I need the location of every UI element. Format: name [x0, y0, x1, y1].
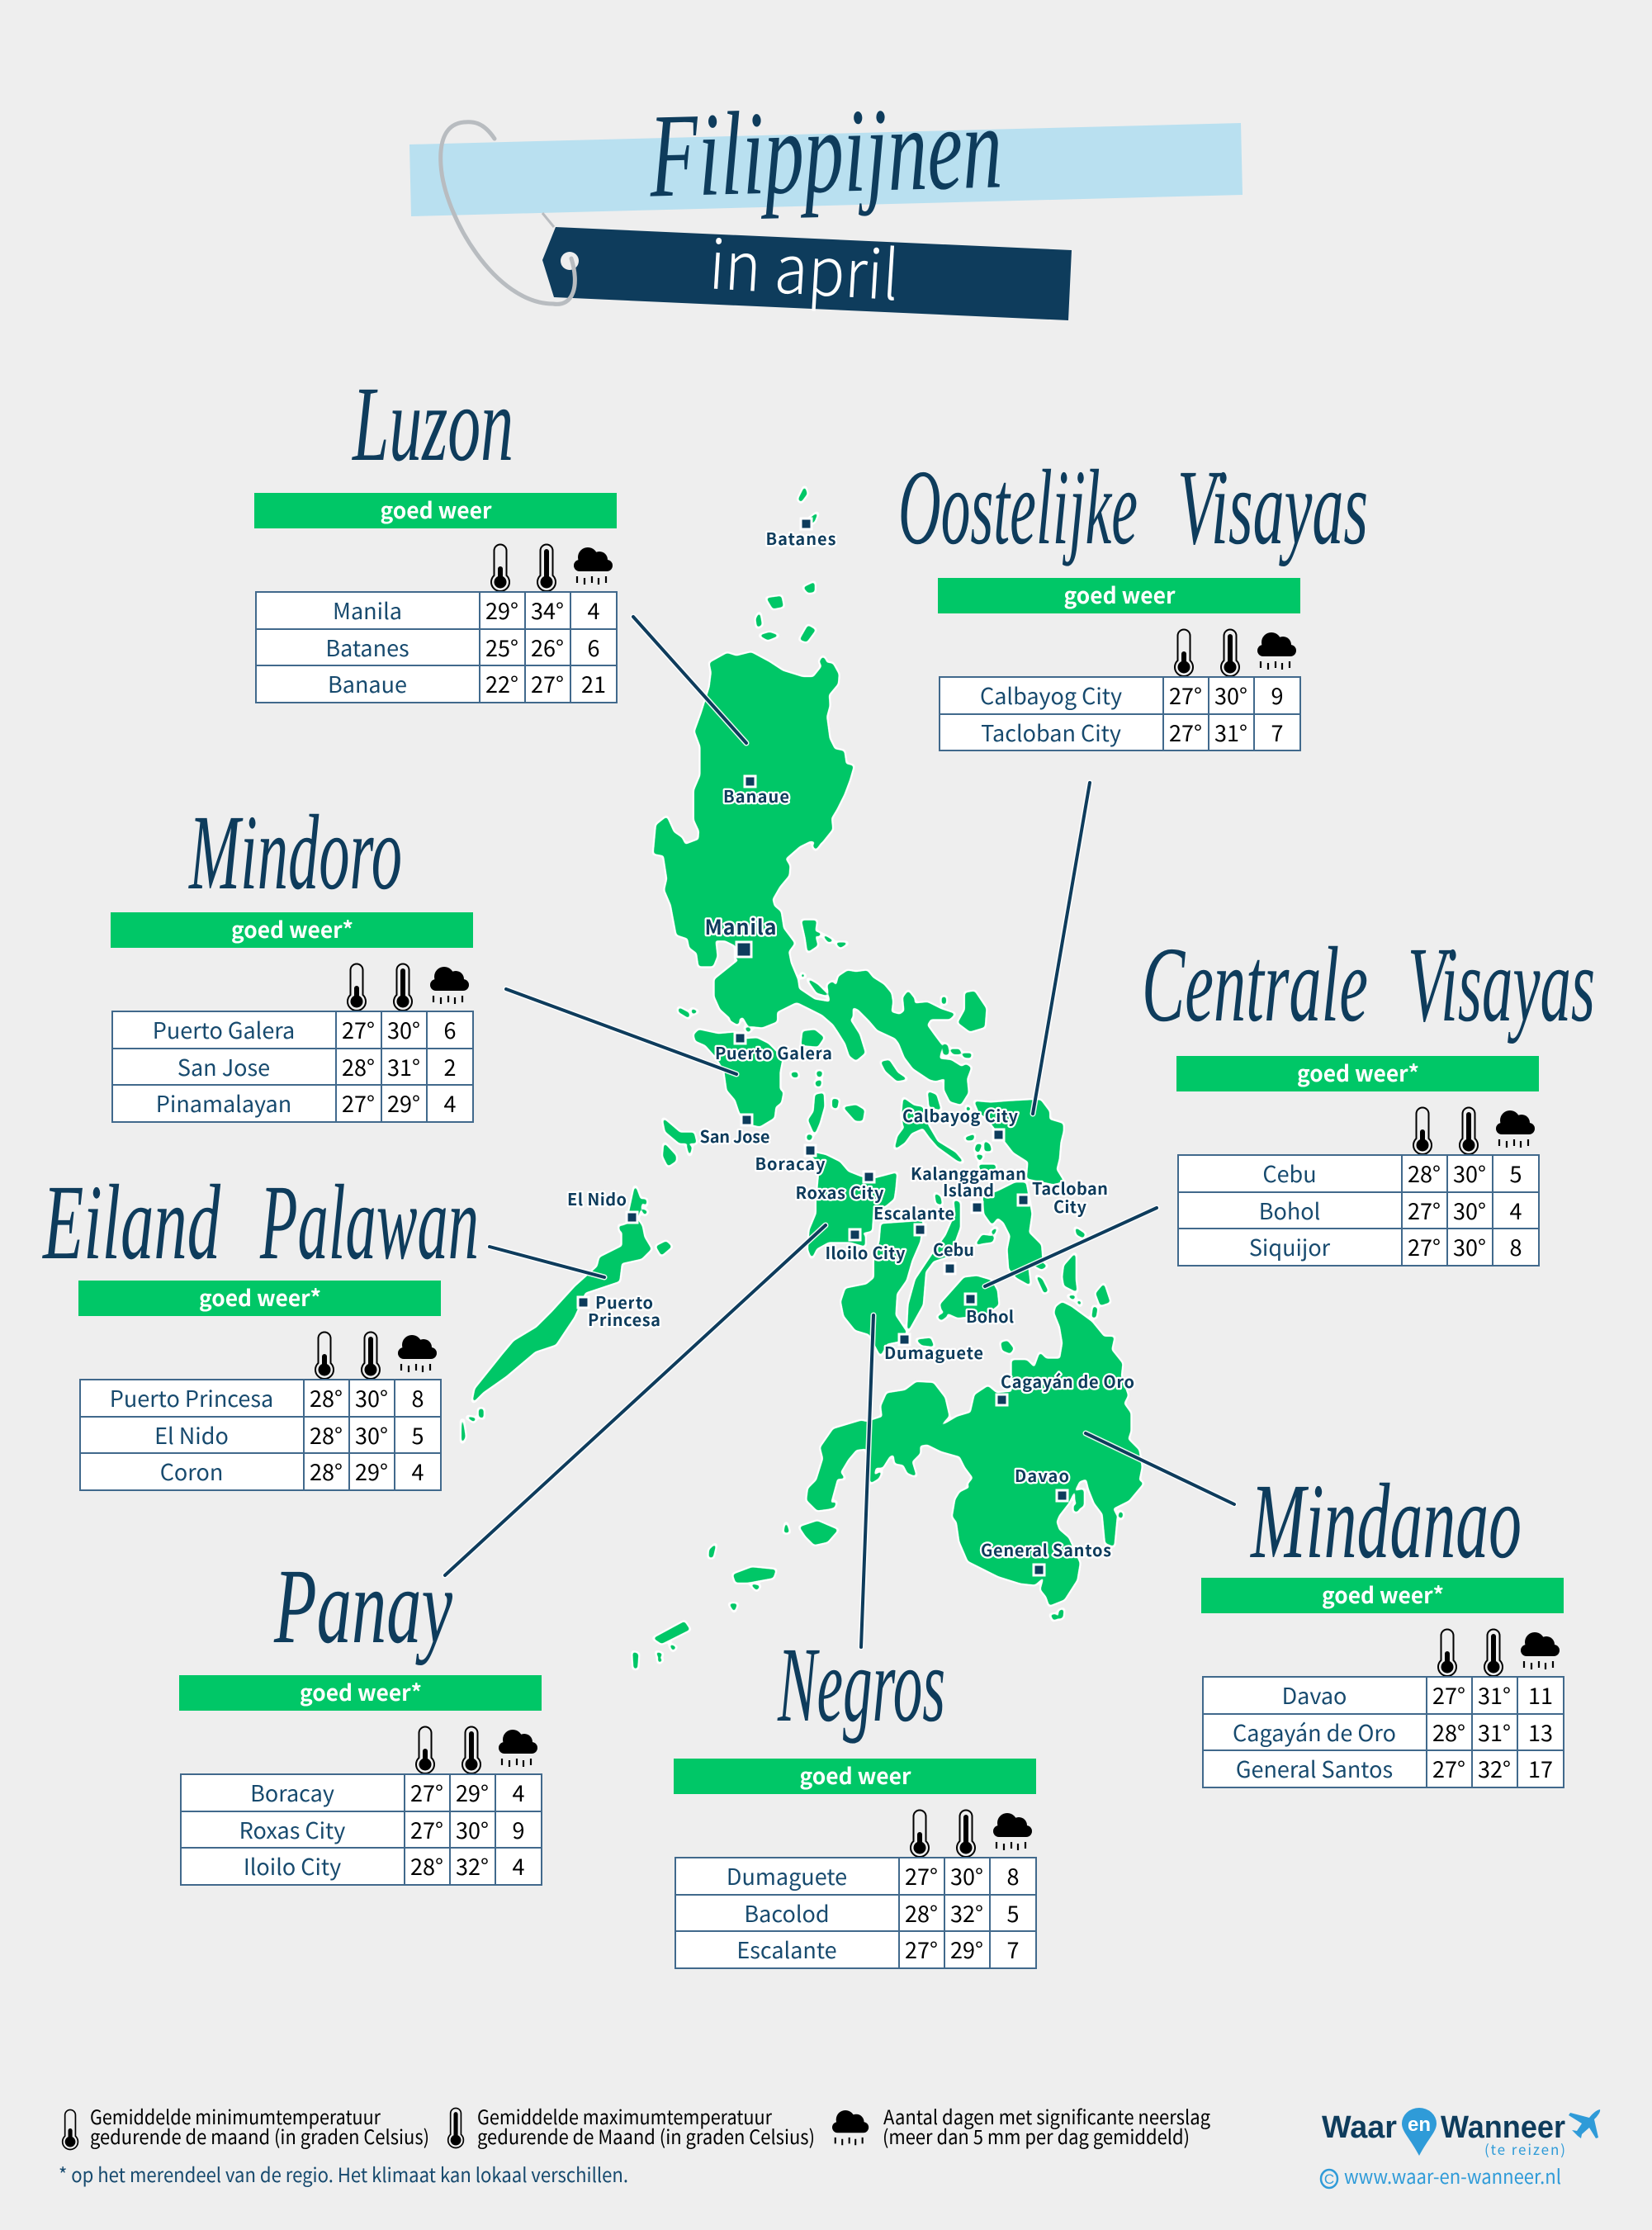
- table: Negros: 7: [1007, 1933, 1019, 1965]
- legend: [59, 2101, 1210, 2188]
- heading: Eiland Palawan: [42, 1163, 479, 1282]
- icon: map pin: [1402, 2108, 1437, 2156]
- legend: precipitation: Aantal dagen met significante neerslag: [883, 2101, 1210, 2130]
- logo: Wanneer: Wanneer: [1441, 2110, 1565, 2145]
- table: Mindoro: 31°: [387, 1050, 420, 1082]
- table: Luzon: 6: [588, 631, 599, 663]
- table: Mindoro: Pinamalayan: [156, 1087, 291, 1119]
- table: Luzon: Batanes: [325, 631, 409, 663]
- table: Mindoro: 27°: [342, 1013, 375, 1045]
- legend: maximum temperature: [448, 2101, 815, 2150]
- legend: precipitation: (meer dan 5 mm per dag gemiddeld): [883, 2121, 1190, 2150]
- map labels: General Santos: [981, 1537, 1111, 1561]
- table: Eiland Palawan: 30°: [355, 1381, 388, 1413]
- map labels: Kalanggaman: [911, 1161, 1026, 1185]
- table: Mindoro: 6: [444, 1013, 456, 1045]
- map labels: Davao: [1015, 1463, 1069, 1487]
- map markers: [578, 518, 1067, 1575]
- table: Panay: 4: [512, 1776, 525, 1808]
- table: Mindanao: 13: [1528, 1716, 1553, 1748]
- table: Luzon: 29°: [485, 594, 518, 626]
- table: Panay: 29°: [456, 1776, 489, 1808]
- table: Mindanao: Davao: [1282, 1678, 1347, 1711]
- map labels: Escalante: [873, 1200, 954, 1224]
- table: Oostelijke Visayas: [938, 578, 1300, 750]
- heading: Centrale Visayas: Centrale: [1142, 926, 1368, 1044]
- map labels: Batanes: [766, 526, 836, 550]
- table: Eiland Palawan: Puerto Princesa: [110, 1381, 273, 1413]
- panel: Mindanao: [1201, 1462, 1564, 1787]
- table: Mindanao: 28°: [1432, 1716, 1465, 1748]
- table: Centrale Visayas: 4: [1509, 1194, 1522, 1226]
- table: Centrale Visayas: 27°: [1408, 1230, 1441, 1262]
- panel: Luzon: [254, 365, 617, 703]
- table: Negros: 8: [1007, 1859, 1019, 1891]
- map labels: Princesa: [588, 1307, 660, 1331]
- table: Mindanao: Cagayán de Oro: [1233, 1716, 1396, 1748]
- table: Mindanao: 31°: [1478, 1678, 1511, 1711]
- table: Mindoro: goed weer*: [231, 912, 353, 945]
- table: Oostelijke Visayas: 7: [1271, 716, 1283, 748]
- table: Centrale Visayas: 30°: [1453, 1194, 1486, 1226]
- panel: Panay: [179, 1547, 542, 1885]
- legend: maximum temperature: Gemiddelde maximumtemperatuur: [477, 2101, 773, 2130]
- table: Eiland Palawan: [78, 1281, 441, 1490]
- table: Panay: 30°: [456, 1813, 489, 1845]
- panel: Negros: [674, 1626, 1036, 1968]
- table: Mindoro: 29°: [387, 1087, 420, 1119]
- table: Eiland Palawan: goed weer*: [199, 1281, 321, 1313]
- map labels: El Nido: [567, 1186, 627, 1210]
- table: Centrale Visayas: 28°: [1408, 1157, 1441, 1189]
- table: Mindoro: 28°: [342, 1050, 375, 1082]
- table: Mindanao: [1201, 1578, 1564, 1787]
- tag: [542, 227, 1072, 320]
- logo: [1321, 2108, 1600, 2190]
- table: Eiland Palawan: 28°: [310, 1455, 343, 1487]
- icon: copyright: C: [1324, 2171, 1334, 2187]
- table: Centrale Visayas: [1176, 1056, 1539, 1266]
- panel: Oostelijke Visayas: [898, 448, 1368, 750]
- table: Mindoro: Puerto Galera: [153, 1013, 295, 1045]
- map labels: Roxas City: [796, 1180, 884, 1204]
- table: Oostelijke Visayas: Calbayog City: [980, 679, 1122, 711]
- map labels: City: [1053, 1194, 1087, 1218]
- table: Negros: 27°: [905, 1859, 938, 1891]
- table: Centrale Visayas: 30°: [1453, 1157, 1486, 1189]
- table: Eiland Palawan: 29°: [355, 1455, 388, 1487]
- tag string back: [542, 213, 554, 227]
- map labels: Cebu: [933, 1237, 974, 1261]
- table: Luzon: 25°: [485, 631, 518, 663]
- table: Oostelijke Visayas: goed weer: [1063, 578, 1176, 610]
- heading: Negros: Negros: [777, 1626, 945, 1745]
- connector lines: [445, 617, 1234, 1647]
- table: Luzon: Banaue: [328, 667, 407, 699]
- table: Centrale Visayas: 30°: [1453, 1230, 1486, 1262]
- table: Negros: 29°: [950, 1933, 983, 1965]
- website url: www.waar-en-wanneer.nl: [1344, 2161, 1561, 2190]
- table: Panay: 9: [512, 1813, 525, 1845]
- logo: en: en: [1408, 2114, 1431, 2136]
- table: Mindoro: 2: [444, 1050, 456, 1082]
- table: Panay: 28°: [410, 1849, 443, 1882]
- map labels: Tacloban: [1032, 1176, 1108, 1200]
- table: Mindoro: San Jose: [178, 1050, 270, 1082]
- table: Mindanao: 11: [1528, 1678, 1553, 1711]
- table: Centrale Visayas: goed weer*: [1297, 1056, 1419, 1088]
- table: Mindanao: 32°: [1478, 1752, 1511, 1784]
- legend: precipitation: [832, 2101, 1210, 2150]
- table: Oostelijke Visayas: 27°: [1169, 716, 1202, 748]
- table: Luzon: 34°: [531, 594, 564, 626]
- table: Mindanao: 27°: [1432, 1752, 1465, 1784]
- table: Oostelijke Visayas: 30°: [1214, 679, 1247, 711]
- logo: te reizen: (te reizen): [1484, 2138, 1565, 2159]
- table: Panay: 27°: [410, 1776, 443, 1808]
- tag string: [441, 122, 575, 304]
- table: Oostelijke Visayas: Tacloban City: [981, 716, 1121, 748]
- table: Centrale Visayas: 8: [1509, 1230, 1522, 1262]
- icon: plane: [1569, 2109, 1600, 2138]
- table: Mindoro: 27°: [342, 1087, 375, 1119]
- map labels: Island: [943, 1177, 994, 1201]
- map of the Philippines: [462, 488, 1142, 1668]
- table: Luzon: 21: [581, 667, 606, 699]
- table: Mindoro: 30°: [387, 1013, 420, 1045]
- table: Centrale Visayas: 5: [1509, 1157, 1522, 1189]
- table: Eiland Palawan: 28°: [310, 1381, 343, 1413]
- map labels: San Jose: [700, 1124, 769, 1148]
- map labels: Calbayog City: [902, 1103, 1019, 1127]
- panel: Centrale Visayas: [1142, 926, 1595, 1266]
- heading: Oostelijke Visayas: Oostelijke: [898, 448, 1138, 567]
- footnote: * op het merendeel van de regio. Het klimaat kan lokaal verschillen.: [59, 2159, 628, 2188]
- table: Luzon: Manila: [333, 594, 402, 626]
- map labels: Puerto Galera: [715, 1040, 832, 1064]
- table: Eiland Palawan: 30°: [355, 1418, 388, 1451]
- icon: copyright: [1321, 2170, 1337, 2188]
- legend: minimum temperature: gedurende de maand (in graden Celsius): [90, 2121, 429, 2150]
- table: Oostelijke Visayas: 31°: [1214, 716, 1247, 748]
- table: Oostelijke Visayas: 9: [1271, 679, 1283, 711]
- table: Panay: Roxas City: [239, 1813, 345, 1845]
- logo: Waar: Waar: [1322, 2110, 1397, 2145]
- table: Panay: [179, 1675, 542, 1885]
- table: Negros: goed weer: [799, 1759, 911, 1791]
- table: Negros: Escalante: [736, 1933, 837, 1965]
- heading: Eiland Palawan: Eiland: [42, 1163, 221, 1282]
- title banner: [409, 81, 1243, 320]
- heading: Oostelijke Visayas: Visayas: [1177, 448, 1368, 567]
- table: Centrale Visayas: 27°: [1408, 1194, 1441, 1226]
- title stripe: [409, 123, 1243, 216]
- table: Luzon: 4: [588, 594, 599, 626]
- table: Eiland Palawan: 5: [411, 1418, 424, 1451]
- heading: Panay: Panay: [273, 1547, 452, 1666]
- table: Negros: [674, 1759, 1036, 1968]
- subtitle: in april: [707, 210, 902, 320]
- table: Panay: Boracay: [250, 1776, 334, 1808]
- table: Negros: 32°: [950, 1896, 983, 1929]
- map labels: Iloilo City: [826, 1240, 906, 1264]
- title text: Filippijnen: [647, 81, 1004, 223]
- table: Luzon: 22°: [485, 667, 518, 699]
- heading: Eiland Palawan: Palawan: [259, 1163, 479, 1282]
- table: Eiland Palawan: Coron: [160, 1455, 223, 1487]
- table: Mindanao: goed weer*: [1322, 1578, 1444, 1610]
- map labels: [567, 526, 1134, 1561]
- table: Negros: 27°: [905, 1933, 938, 1965]
- table: Mindanao: 17: [1528, 1752, 1553, 1784]
- table: Negros: 28°: [905, 1896, 938, 1929]
- table: Panay: 4: [512, 1849, 525, 1882]
- map labels: Puerto: [595, 1290, 653, 1314]
- map labels: Manila: [705, 911, 776, 941]
- table: Mindoro: [111, 912, 473, 1122]
- table: Eiland Palawan: 28°: [310, 1418, 343, 1451]
- table: Mindanao: 31°: [1478, 1716, 1511, 1748]
- map labels: Banaue: [723, 784, 789, 807]
- table: Mindoro: 4: [444, 1087, 456, 1119]
- table: Luzon: [254, 493, 617, 703]
- map labels: Bohol: [966, 1304, 1014, 1328]
- table: Negros: Bacolod: [744, 1896, 830, 1929]
- table: Panay: 32°: [456, 1849, 489, 1882]
- tag hole: [561, 252, 579, 270]
- table: Panay: 27°: [410, 1813, 443, 1845]
- table: Luzon: 26°: [531, 631, 564, 663]
- map labels: Boracay: [755, 1151, 826, 1175]
- legend: minimum temperature: [63, 2101, 429, 2150]
- table: Centrale Visayas: Bohol: [1259, 1194, 1320, 1226]
- panel: Eiland Palawan: [42, 1163, 479, 1490]
- heading: Luzon: Luzon: [352, 365, 514, 484]
- table: Luzon: 27°: [531, 667, 564, 699]
- map labels: Dumaguete: [884, 1340, 983, 1364]
- table: Mindanao: General Santos: [1236, 1752, 1393, 1784]
- table: Mindanao: 27°: [1432, 1678, 1465, 1711]
- table: Panay: goed weer*: [300, 1675, 422, 1707]
- table: Negros: 30°: [950, 1859, 983, 1891]
- table: Eiland Palawan: El Nido: [154, 1418, 229, 1451]
- table: Negros: Dumaguete: [727, 1859, 847, 1891]
- table: Eiland Palawan: 4: [411, 1455, 424, 1487]
- table: Eiland Palawan: 8: [411, 1381, 424, 1413]
- table: Negros: 5: [1007, 1896, 1019, 1929]
- heading: Mindoro: Mindoro: [188, 793, 402, 912]
- table: Centrale Visayas: Cebu: [1262, 1157, 1317, 1189]
- table: Luzon: goed weer: [380, 493, 492, 525]
- table: Centrale Visayas: Siquijor: [1249, 1230, 1331, 1262]
- table: Panay: Iloilo City: [244, 1849, 341, 1882]
- legend: minimum temperature: Gemiddelde minimumtemperatuur: [90, 2101, 381, 2130]
- panel: Mindoro: [111, 793, 473, 1122]
- map labels: Cagayán de Oro: [1001, 1369, 1134, 1393]
- table: Oostelijke Visayas: 27°: [1169, 679, 1202, 711]
- legend: maximum temperature: gedurende de Maand (in graden Celsius): [477, 2121, 815, 2150]
